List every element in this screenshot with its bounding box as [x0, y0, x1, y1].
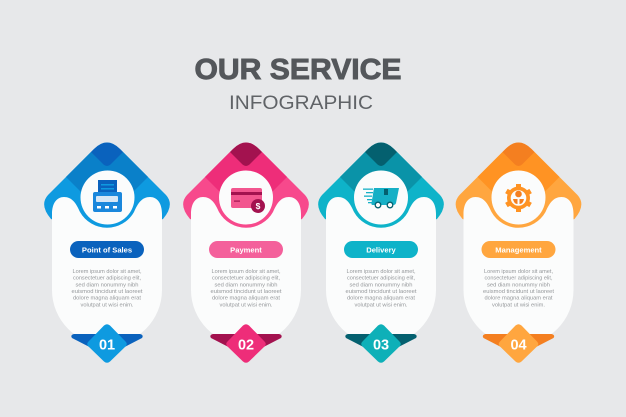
roof [456, 142, 581, 240]
panel: delivery [318, 142, 444, 363]
label pill [344, 241, 418, 258]
label pill [70, 241, 144, 258]
roof [183, 142, 309, 240]
body text: volutpat ut wisi enim. [354, 302, 408, 308]
number badge [71, 324, 143, 363]
body text: consectetuer adipiscing elit, [347, 276, 416, 282]
body text: euismod tincidunt ut laoreet [72, 289, 143, 295]
body text: Lorem ipsum dolor sit amet, [346, 269, 416, 275]
body text: dolore magna aliquam erat [484, 296, 553, 302]
panel: management [456, 142, 581, 363]
number badge: 02 [238, 338, 254, 354]
body text [346, 269, 417, 308]
card body [326, 197, 436, 345]
body text [483, 269, 555, 308]
number badge [345, 324, 417, 363]
number badge: 04 [510, 338, 527, 354]
roof [44, 142, 170, 240]
body text: dolore magna aliquam erat [347, 296, 416, 302]
icon: delivery truck [354, 170, 408, 224]
body text: volutpat ut wisi enim. [220, 302, 272, 308]
roof [318, 142, 444, 240]
body text: dolore magna aliquam erat [212, 296, 281, 302]
label pill: Management [495, 246, 542, 254]
body text [72, 269, 143, 308]
body text: volutpat ut wisi enim. [80, 302, 134, 308]
body text: euismod tincidunt ut laoreet [210, 289, 282, 295]
label pill: Point of Sales [82, 246, 132, 254]
body text: Lorem ipsum dolor sit amet, [212, 269, 281, 275]
body text: sed diam nonummy nibh [487, 282, 550, 288]
panel: point of sales [44, 142, 170, 363]
icon: credit card [219, 170, 273, 224]
number badge [210, 324, 282, 363]
icon: credit card: $ [256, 201, 261, 211]
icon: gear with team [492, 170, 546, 224]
number badge: 01 [99, 338, 115, 354]
number badge: 03 [373, 338, 389, 354]
icon: cash register [80, 170, 134, 224]
title: OUR SERVICE [194, 54, 402, 86]
body text [210, 269, 282, 308]
number badge [483, 324, 554, 363]
card body [52, 197, 162, 345]
body text: sed diam nonummy nibh [349, 282, 413, 288]
label pill: Payment [230, 246, 262, 254]
card body [191, 197, 301, 345]
body text: volutpat ut wisi enim. [492, 302, 545, 308]
body text: Lorem ipsum dolor sit amet, [72, 269, 142, 275]
body text: Lorem ipsum dolor sit amet, [484, 269, 554, 275]
body text: dolore magna aliquam erat [73, 296, 142, 302]
label pill [209, 241, 283, 258]
card body [464, 197, 574, 345]
subtitle: INFOGRAPHIC [229, 93, 373, 114]
panel: payment [183, 142, 309, 363]
body text: euismod tincidunt ut laoreet [483, 289, 555, 295]
body text: sed diam nonummy nibh [214, 282, 278, 288]
body text: consectetuer adipiscing elit, [212, 276, 281, 282]
body text: consectetuer adipiscing elit, [73, 276, 142, 282]
label pill: Delivery [366, 246, 397, 254]
body text: sed diam nonummy nibh [75, 282, 139, 288]
body text: euismod tincidunt ut laoreet [346, 289, 417, 295]
label pill [482, 241, 556, 258]
body text: consectetuer adipiscing elit, [484, 276, 553, 282]
